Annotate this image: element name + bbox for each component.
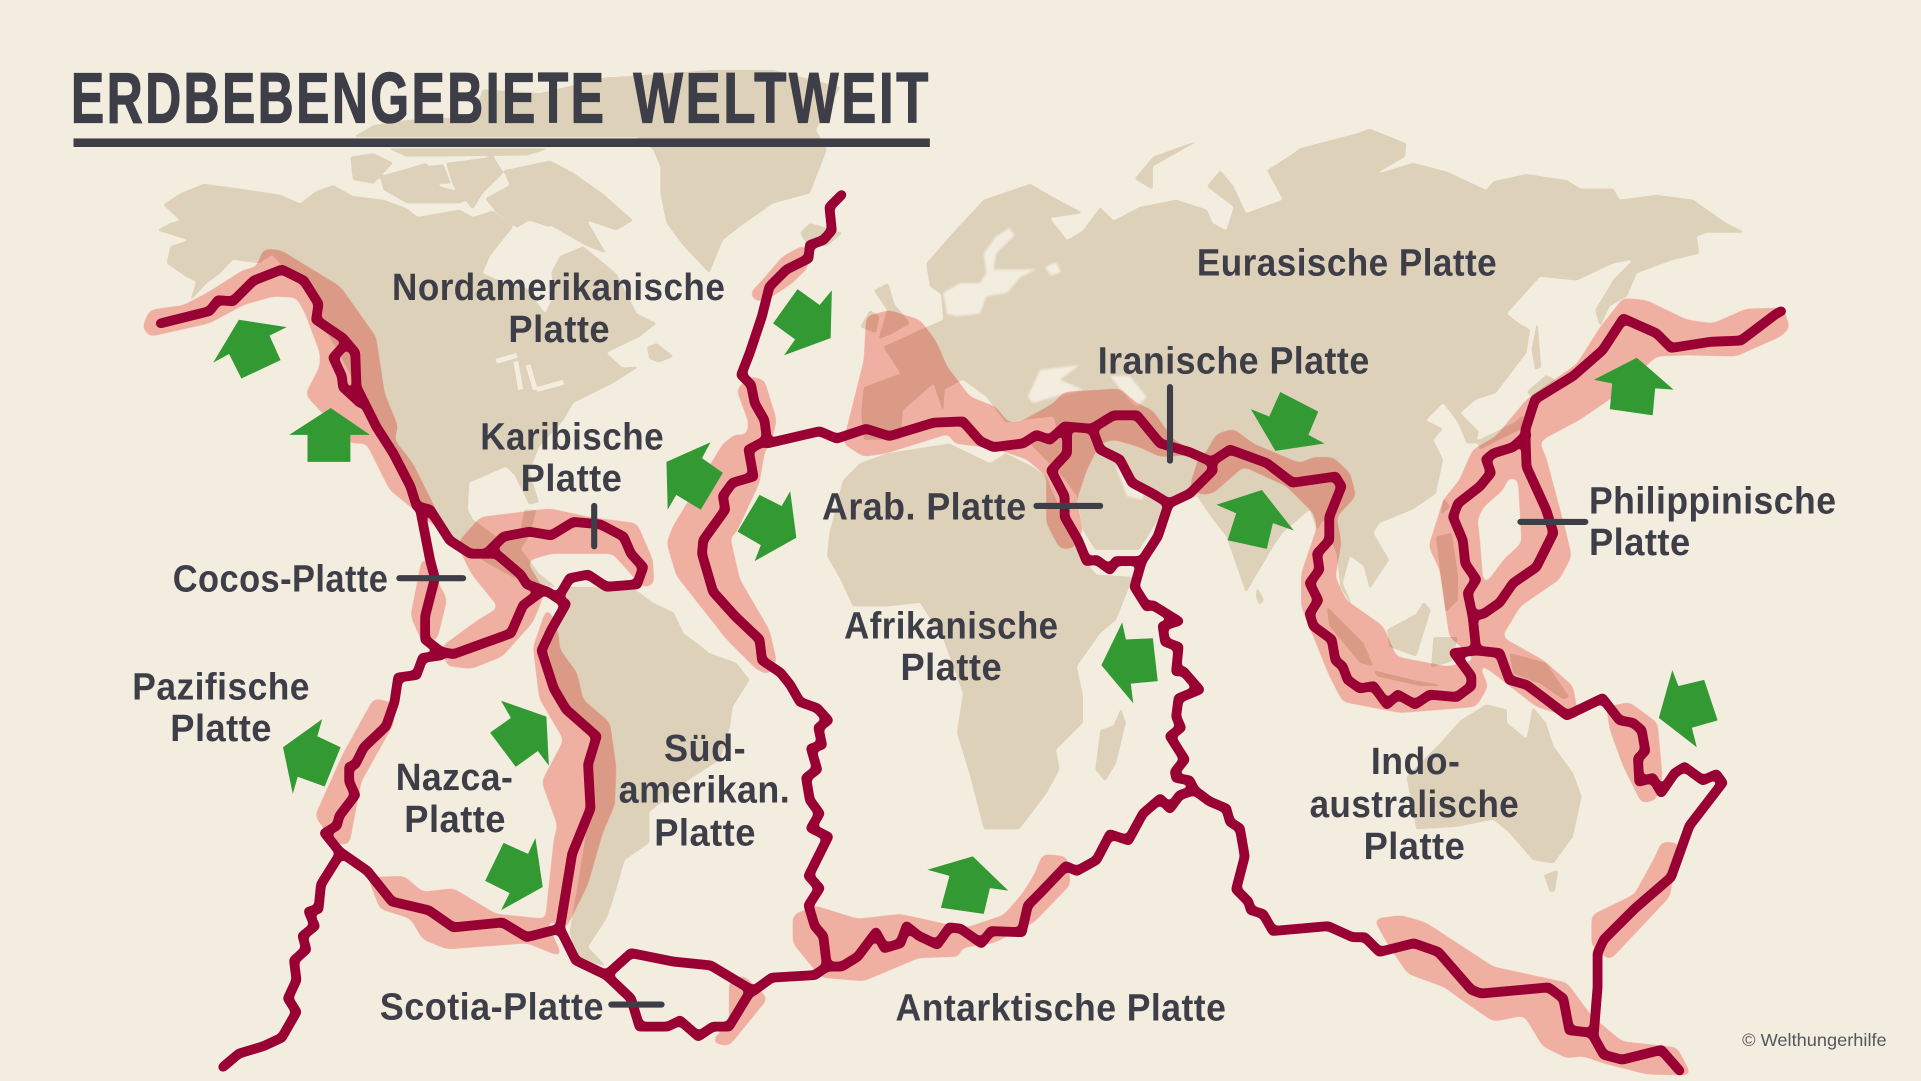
arrow: Iranian plate xyxy=(1251,392,1324,451)
earthquake risk zones xyxy=(142,244,1790,1076)
label: Indoaustralische Platte: Platte xyxy=(1364,826,1465,868)
arrow: North Atlantic xyxy=(773,289,832,355)
leader: Scotia-Platte xyxy=(611,1002,662,1007)
zone: Nazca south xyxy=(368,876,564,958)
label: Philippinische Platte: Philippinische xyxy=(1589,480,1836,522)
zone: south of Australia xyxy=(1373,915,1692,1076)
boundary: Caribbean plate xyxy=(486,522,643,593)
arrow: Atlantic east xyxy=(738,491,796,561)
zone: Cocos west strip xyxy=(410,554,447,643)
land: Sri Lanka xyxy=(1256,587,1264,605)
label: Afrikanische Platte xyxy=(844,605,1059,689)
arrow: Tonga xyxy=(1659,670,1718,747)
zone: Mediterranean, Himalaya and Sunda arc xyxy=(843,310,1489,713)
arrow: Pacific north xyxy=(213,320,287,379)
title: ERDBEBENGEBIETE xyxy=(71,60,606,139)
boundary: Aleutians and North America xyxy=(160,270,548,592)
label: Scotia-Platte: Scotia-Platte xyxy=(380,986,604,1028)
arrow: India xyxy=(1217,490,1294,549)
leader: Karibische Platte xyxy=(592,506,597,546)
title: WELTWEIT xyxy=(633,60,931,139)
zone: Southwest Indian ridge xyxy=(793,854,1071,981)
label: Nazca-Platte: Platte xyxy=(404,799,506,841)
leader: Arab. Platte xyxy=(1036,503,1100,508)
label: Karibische Platte xyxy=(480,417,664,500)
world map land masses xyxy=(157,70,1746,967)
leader: Philippinische Platte xyxy=(1520,519,1585,524)
land: Ireland xyxy=(860,310,880,333)
label: Nazca-Platte: Nazca- xyxy=(396,757,513,799)
boundary: coastal side loop xyxy=(333,347,360,403)
label: Nordamerikanische Platte: Platte xyxy=(508,309,610,351)
boundary: Philippine plate east and Japan xyxy=(1473,311,1781,616)
label: Afrikanische Platte: Afrikanische xyxy=(844,605,1059,647)
arrow: Northwest Pacific xyxy=(1594,358,1674,415)
land: Novaya Zemlya xyxy=(1134,137,1207,190)
arrow: Nazca lower xyxy=(485,838,543,910)
land: inland seas xyxy=(943,228,1147,500)
zone: Central America and Caribbean xyxy=(441,508,654,669)
label: Nazca-Platte xyxy=(396,757,513,841)
land: Newfoundland xyxy=(647,343,674,363)
arrow: Antarctic xyxy=(927,856,1008,914)
plate boundaries xyxy=(160,195,1781,1071)
title underline xyxy=(74,138,930,147)
zone: Japan, Philippines and New Guinea xyxy=(1428,298,1790,720)
label: Pazifische Platte: Platte xyxy=(170,708,272,750)
label: Eurasische Platte: Eurasische Platte xyxy=(1197,243,1497,285)
land: Southeast Asia islands xyxy=(1327,320,1569,700)
boundary: south Pacific ridge xyxy=(223,855,339,1067)
land: Canadian Arctic islands xyxy=(350,148,633,254)
label: Pazifische Platte: Pazifische xyxy=(132,667,310,709)
land: Britain xyxy=(874,283,910,339)
land: South America xyxy=(546,587,750,967)
label: Philippinische Platte xyxy=(1589,480,1836,564)
boundary: Scotia plate xyxy=(606,953,827,1036)
label: Karibische Platte: Platte xyxy=(521,458,622,500)
land: North America xyxy=(157,184,657,588)
land: Great Lakes xyxy=(496,355,564,390)
label: Philippinische Platte: Platte xyxy=(1589,522,1691,564)
label: Cocos-Platte: Cocos-Platte xyxy=(173,559,388,601)
label: Indoaustralische Platte xyxy=(1310,741,1519,868)
label: Arab. Platte: Arab. Platte xyxy=(822,486,1027,528)
zone: Pacific east rise xyxy=(315,698,394,845)
zone: Scotia east xyxy=(711,975,768,1046)
arrow: Africa xyxy=(1101,622,1158,703)
label: Südamerikan. Platte xyxy=(619,728,790,854)
land: Africa xyxy=(827,443,1133,829)
boundary: Cocos plate west xyxy=(420,510,542,654)
zone: North Atlantic xyxy=(750,244,809,301)
label: Nordamerikanische Platte xyxy=(392,267,725,351)
label: Iranische Platte: Iranische Platte xyxy=(1098,341,1370,383)
zone: Andes xyxy=(533,605,616,929)
land: Greenland and Ellesmere xyxy=(353,70,840,273)
land: Eurasia xyxy=(861,129,1746,614)
land: Iceland xyxy=(800,223,843,246)
boundary: Southeast Indian ridge xyxy=(1194,790,1680,1071)
arrow: Atlantic west xyxy=(666,442,723,510)
boundary: Macquarie and Tonga xyxy=(1476,651,1723,1033)
land: Madagascar xyxy=(1095,708,1126,782)
zone: Mid-Atlantic xyxy=(666,376,777,675)
land: Tasmania xyxy=(1544,870,1558,892)
boundary: Iranian plate xyxy=(1093,430,1213,504)
boundary: Arabian plate west xyxy=(1051,430,1142,570)
arrow: Pacific coast xyxy=(289,408,370,462)
label: Nordamerikanische Platte: Nordamerikanische xyxy=(392,267,725,309)
boundary: Philippine plate west xyxy=(1453,435,1527,651)
label: Pazifische Platte xyxy=(132,667,310,750)
leader: Iranische Platte xyxy=(1167,387,1172,461)
arrow: Nazca upper xyxy=(490,701,549,767)
label: Südamerikan. Platte: Platte xyxy=(654,812,756,854)
label: Karibische Platte: Karibische xyxy=(480,417,664,459)
label: Afrikanische Platte: Platte xyxy=(900,647,1002,689)
boundary: Pacific rise xyxy=(325,655,560,937)
boundary: Central Indian ridge xyxy=(1134,504,1199,790)
label: Südamerikan. Platte: Süd- xyxy=(664,728,746,770)
leader lines xyxy=(399,387,1585,1005)
boundary: Eurasia to Sunda xyxy=(767,415,1476,704)
zone: Kermadec xyxy=(1591,842,1680,960)
label: Indoaustralische Platte: Indo- xyxy=(1371,741,1460,783)
boundary: Southwest Indian ridge xyxy=(827,790,1194,967)
boundary: Mid-Atlantic ridge xyxy=(702,195,842,967)
copyright: © Welthungerhilfe xyxy=(1742,1030,1887,1050)
plate movement arrows xyxy=(213,289,1718,914)
label: Südamerikan. Platte: amerikan. xyxy=(619,769,790,811)
arrow: Pacific plate xyxy=(283,719,341,794)
zone: Aleutians and North American west coast xyxy=(142,249,453,540)
land: Australia xyxy=(1406,704,1582,864)
zone: Tonga west xyxy=(1606,702,1662,804)
label: Antarktische Platte: Antarktische Platte xyxy=(896,987,1226,1029)
leader: Cocos-Platte xyxy=(399,576,463,581)
label: Indoaustralische Platte: australische xyxy=(1310,784,1519,826)
boundary: Andes xyxy=(542,592,606,975)
